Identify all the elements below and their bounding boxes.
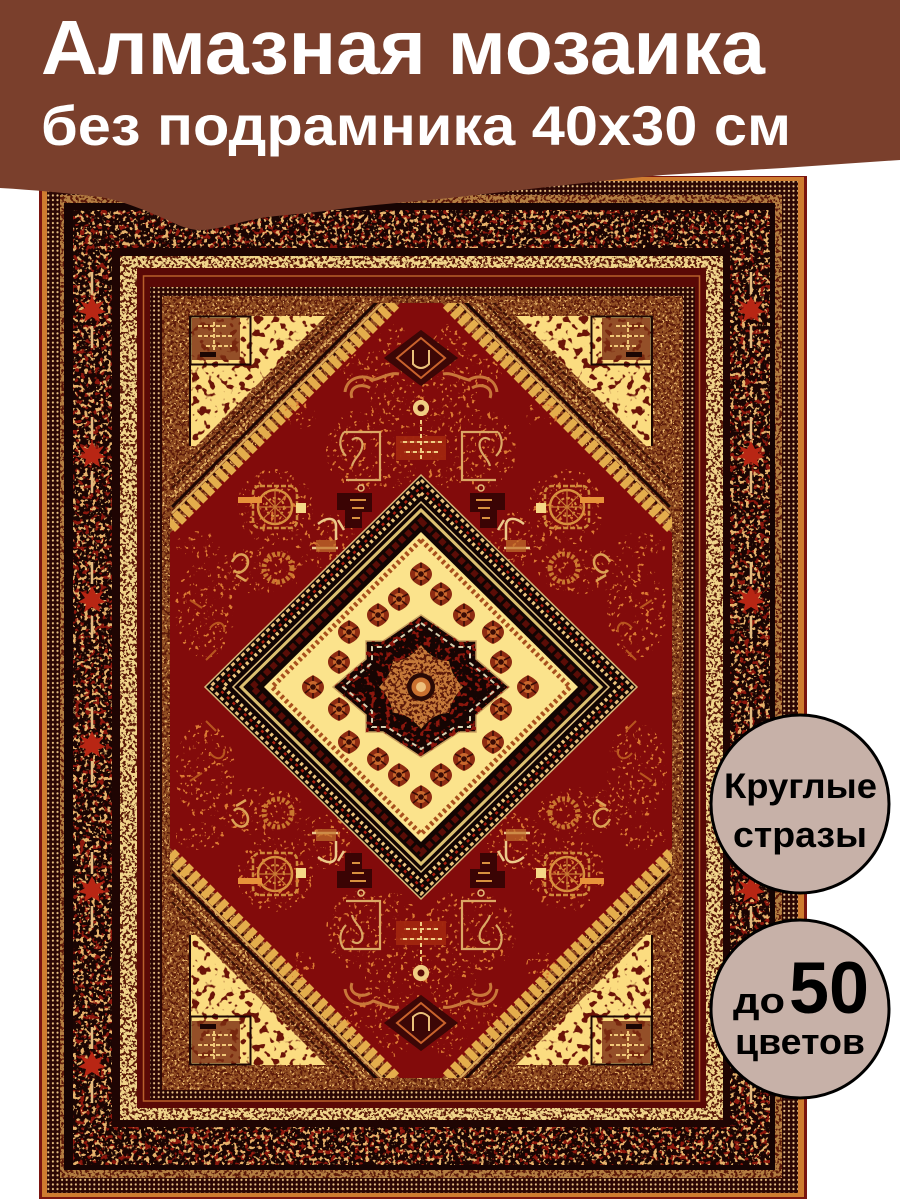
inner dotted border xyxy=(150,287,695,1100)
dark patterned main border xyxy=(64,203,775,1170)
outer edge and orange stripe xyxy=(39,176,807,1199)
corner panels with cream patches and diagonal bands xyxy=(170,301,672,1080)
banner: brown ribbon xyxy=(0,0,900,230)
badge: up to 50 colours: цветов xyxy=(735,1021,865,1062)
diamond borders xyxy=(205,475,637,899)
dark line around cream border xyxy=(112,248,730,1127)
red central field xyxy=(170,303,672,1078)
cream diamond xyxy=(264,532,578,842)
badge: up to 50 colours xyxy=(711,920,889,1098)
dark red border xyxy=(137,268,706,1108)
dotted outer border xyxy=(47,181,798,1193)
central diamond medallion xyxy=(205,475,637,899)
badge: round rhinestones xyxy=(711,715,889,893)
field ornaments xyxy=(190,330,652,1051)
brown inner border xyxy=(162,296,683,1090)
dark star medallion xyxy=(333,615,509,757)
panel: carpet picture xyxy=(39,176,807,1199)
badge: round rhinestones: Круглые xyxy=(724,767,877,806)
tan border stripe xyxy=(60,195,782,1178)
title: Алмазная мозаика xyxy=(41,5,766,91)
cream patterned border xyxy=(120,256,723,1120)
flowers xyxy=(302,562,539,809)
cream diamond fringe xyxy=(272,540,570,834)
inner rosette xyxy=(379,645,463,729)
badge: up to 50 colours: 50 xyxy=(789,948,869,1029)
scattered field speckles xyxy=(175,324,667,1057)
badge: round rhinestones: стразы xyxy=(733,814,867,855)
subtitle: без подрамника 40х30 см xyxy=(41,94,791,157)
badge: up to 50 colours: до xyxy=(733,980,785,1021)
